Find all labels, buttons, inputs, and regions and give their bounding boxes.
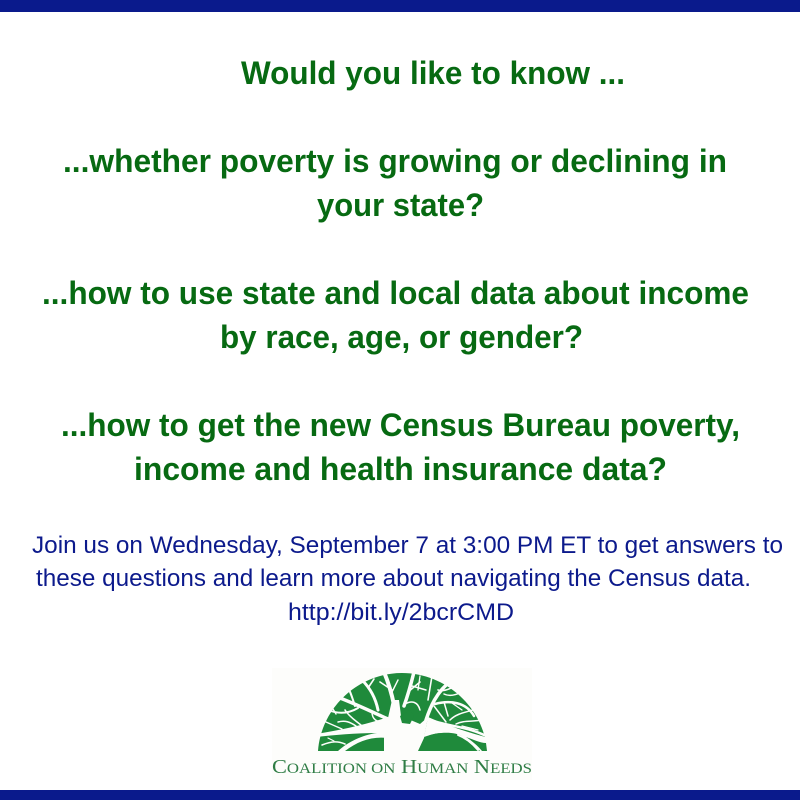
branches: [322, 672, 484, 750]
question 2: ...how to use state and local data about income: [42, 275, 749, 311]
logo wordmark: COALITION ON HUMAN NEEDS: [272, 756, 532, 778]
invitation text block: these questions and learn more about navigating the Census data.: [36, 565, 751, 592]
invitation text block: [32, 532, 783, 626]
question 2: [42, 275, 749, 355]
trunk and ground gaps: [384, 700, 428, 751]
invitation text block: Join us on Wednesday, September 7 at 3:00 PM ET to get answers to: [32, 532, 783, 559]
question 1: [63, 143, 727, 223]
top border bar: [0, 0, 800, 12]
heading: Would you like to know ...: [241, 55, 625, 91]
icon: tree canopy semicircle: [316, 672, 489, 751]
question 2: by race, age, or gender?: [220, 319, 583, 355]
question 3: ...how to get the new Census Bureau poverty,: [61, 407, 740, 443]
bottom border bar: [0, 790, 800, 800]
question 3: income and health insurance data?: [134, 451, 667, 487]
question 1: your state?: [317, 187, 484, 223]
question 1: ...whether poverty is growing or declining in: [63, 143, 727, 179]
centre leaf wedge: [400, 710, 414, 724]
logo: Coalition on Human Needs: [272, 668, 532, 780]
question 3: [61, 407, 740, 487]
invitation text block: http://bit.ly/2bcrCMD: [288, 599, 514, 626]
